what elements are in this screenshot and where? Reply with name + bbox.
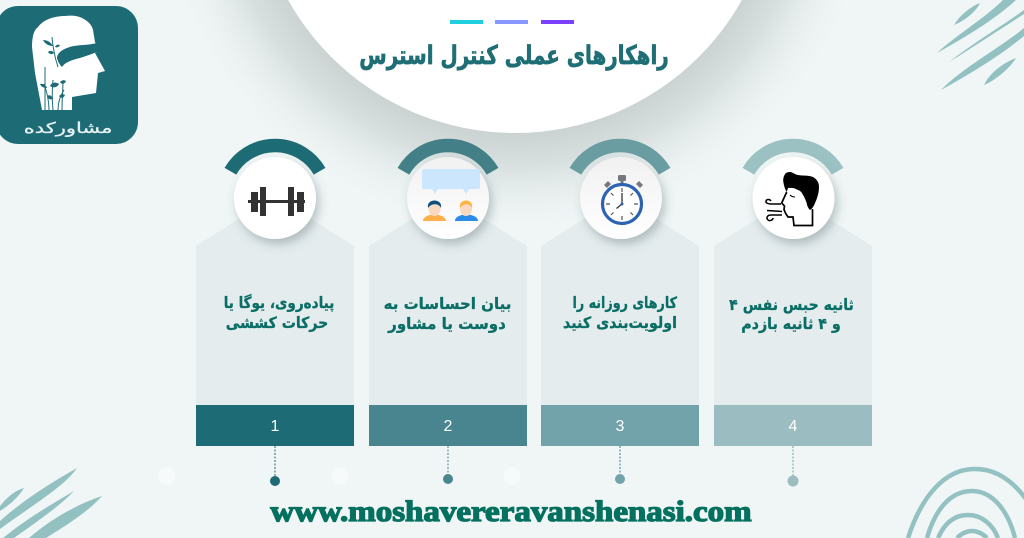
card 2 number bar bbox=[369, 405, 527, 446]
card 4: breathing bbox=[714, 146, 872, 487]
card 2 arc bbox=[403, 146, 493, 171]
icon: stopwatch bbox=[602, 175, 643, 224]
card 3 number bar bbox=[541, 405, 699, 446]
header circle with shadow bbox=[150, 0, 880, 238]
card 4 text: ثانیه حبس نفس ۴ bbox=[729, 296, 854, 314]
card 3 icon circle bbox=[580, 157, 662, 239]
card 4 panel bbox=[714, 196, 872, 405]
card 3 connector bbox=[615, 446, 625, 484]
card 3 number bar: 3 bbox=[616, 418, 625, 435]
accent dashes bbox=[450, 20, 574, 24]
decoration: bottom left brush strokes bbox=[0, 468, 102, 538]
website address: www.moshavereravanshenasi.com bbox=[270, 494, 752, 528]
card 1 number bar bbox=[196, 405, 354, 446]
card 1 connector bbox=[270, 446, 280, 486]
card 2 panel bbox=[369, 196, 527, 405]
logo bbox=[0, 6, 138, 144]
icon: face breathing out bbox=[766, 172, 819, 226]
card 1 number bar: 1 bbox=[271, 418, 280, 435]
title: راهکارهای عملی کنترل استرس bbox=[359, 42, 669, 71]
card 1 text bbox=[224, 293, 334, 332]
card 2 text bbox=[384, 295, 511, 333]
card 3 arc bbox=[575, 146, 665, 171]
card 4 connector bbox=[788, 446, 798, 486]
card 3 text: اولویت‌بندی کنید bbox=[563, 313, 677, 332]
card 4 arc bbox=[748, 146, 838, 171]
card 2 connector bbox=[443, 446, 453, 484]
card 4 number bar: 4 bbox=[789, 418, 798, 435]
card 4 number bar bbox=[714, 405, 872, 446]
decorative white dots bbox=[158, 468, 520, 484]
card 2 number bar: 2 bbox=[444, 418, 453, 435]
icon: barbell bbox=[248, 187, 305, 216]
card 1 text: پیاده‌روی، یوگا یا bbox=[224, 293, 334, 312]
decoration: bottom right fingerprint arcs bbox=[908, 469, 1024, 538]
card 2: talking bbox=[369, 146, 527, 484]
card 3: prioritise bbox=[541, 146, 699, 484]
card 2 icon circle bbox=[407, 157, 489, 239]
card 1 panel bbox=[196, 196, 354, 405]
decoration: top right brush strokes bbox=[937, 0, 1024, 90]
logo wordmark: مشاورکده bbox=[24, 120, 112, 137]
card 4 icon circle bbox=[752, 157, 834, 239]
card 4 text bbox=[729, 296, 854, 333]
card 1: walking, yoga bbox=[196, 146, 354, 486]
card 3 text: کارهای روزانه را bbox=[573, 295, 678, 312]
card 1 arc bbox=[230, 146, 320, 171]
card 2 text: دوست یا مشاور bbox=[387, 315, 506, 333]
card 2 text: بیان احساسات به bbox=[384, 295, 511, 313]
card 1 text: حرکات کششی bbox=[226, 314, 328, 332]
icon: two people with speech bubble bbox=[422, 169, 480, 221]
card 3 panel bbox=[541, 196, 699, 405]
card 3 text bbox=[563, 295, 678, 332]
card 4 text: و ۴ ثانیه بازدم bbox=[741, 314, 841, 333]
card 1 icon circle bbox=[234, 157, 316, 239]
